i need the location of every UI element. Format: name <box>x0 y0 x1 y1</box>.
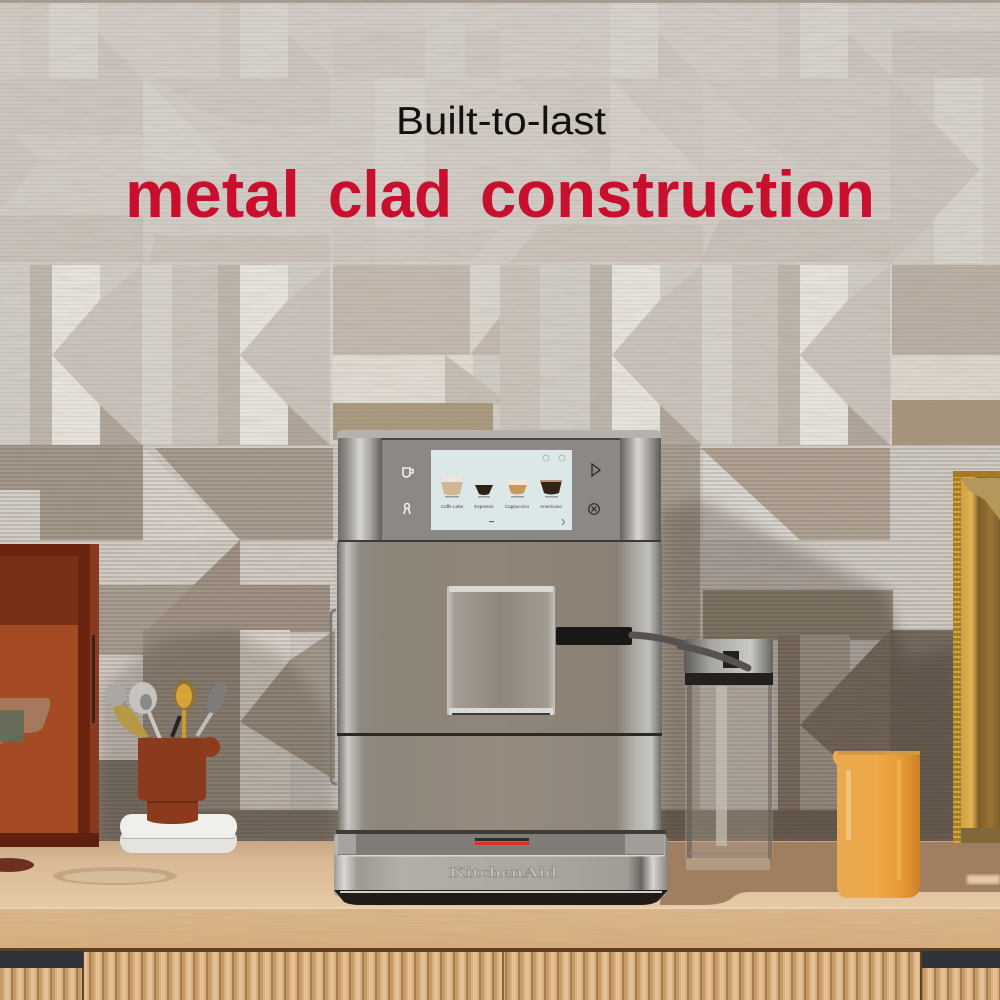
control panel <box>382 438 620 541</box>
jug dark collar <box>685 672 773 685</box>
yellow pitcher <box>833 751 920 898</box>
wallpaper: soften upper area <box>0 0 1000 265</box>
icon: cup button <box>403 468 413 477</box>
title: metal clad construction: clad <box>328 157 452 231</box>
fluted cabinet front <box>0 951 1000 1000</box>
title: metal clad construction: construction <box>480 157 875 231</box>
marble coasters <box>120 814 237 853</box>
milk tube <box>556 627 748 668</box>
spoons <box>106 678 231 740</box>
red indicator <box>475 842 529 845</box>
icon: person button <box>404 504 410 514</box>
wallpaper: third row band <box>0 215 890 262</box>
counter front edge <box>0 908 1000 949</box>
countertop <box>0 841 1000 952</box>
glass bowl <box>0 698 50 744</box>
wooden frame left <box>0 544 99 847</box>
drink: cappuccino <box>505 480 530 509</box>
icon: play button <box>592 464 600 476</box>
wallpaper: top row tiles <box>20 3 1000 78</box>
wallpaper: K-shaped middle row <box>30 265 1000 445</box>
drink: caffe latte: Caffe Latte <box>441 504 464 509</box>
base feet shadow <box>334 890 668 905</box>
drink: cappuccino: Cappuccino <box>505 504 530 509</box>
shadow cast on wall <box>100 500 960 845</box>
upper housing <box>338 438 661 541</box>
title: metal clad construction: metal <box>125 157 300 231</box>
gold picture frame <box>953 471 1000 843</box>
spoon cup <box>106 678 231 824</box>
machine top lid <box>337 430 661 440</box>
milk jug <box>680 639 773 870</box>
dispenser box <box>447 586 555 715</box>
cup body <box>138 738 206 824</box>
drink: espresso <box>474 485 494 509</box>
touch screen <box>431 450 572 530</box>
title: metal clad construction <box>125 157 875 231</box>
screen status icons <box>543 455 565 461</box>
icon: cancel button <box>589 504 599 514</box>
wallpaper: second row tiles <box>0 78 983 265</box>
coffee machine <box>331 430 748 905</box>
drink: caffe latte <box>440 474 464 509</box>
small dark dish <box>0 858 34 872</box>
counter shadow and light patches <box>53 842 1000 905</box>
lower body drawer <box>338 736 661 830</box>
cabinet handle left <box>0 951 83 968</box>
jug clear body <box>685 680 773 870</box>
drink: americano <box>540 480 562 509</box>
screen next arrow <box>562 519 564 525</box>
drink: americano: Americano <box>540 504 562 509</box>
cabinet handle right <box>922 951 1000 968</box>
title: built-to-last: Built-to-last <box>396 100 606 143</box>
jug lid <box>684 639 773 673</box>
kitchenaid emboss logo: KitchenAid <box>449 865 558 881</box>
wallpaper: lower row <box>0 445 1000 845</box>
main body <box>337 542 662 734</box>
side handle <box>331 610 337 784</box>
base and drip tray <box>334 830 668 905</box>
drink: espresso: Espresso <box>474 504 494 509</box>
